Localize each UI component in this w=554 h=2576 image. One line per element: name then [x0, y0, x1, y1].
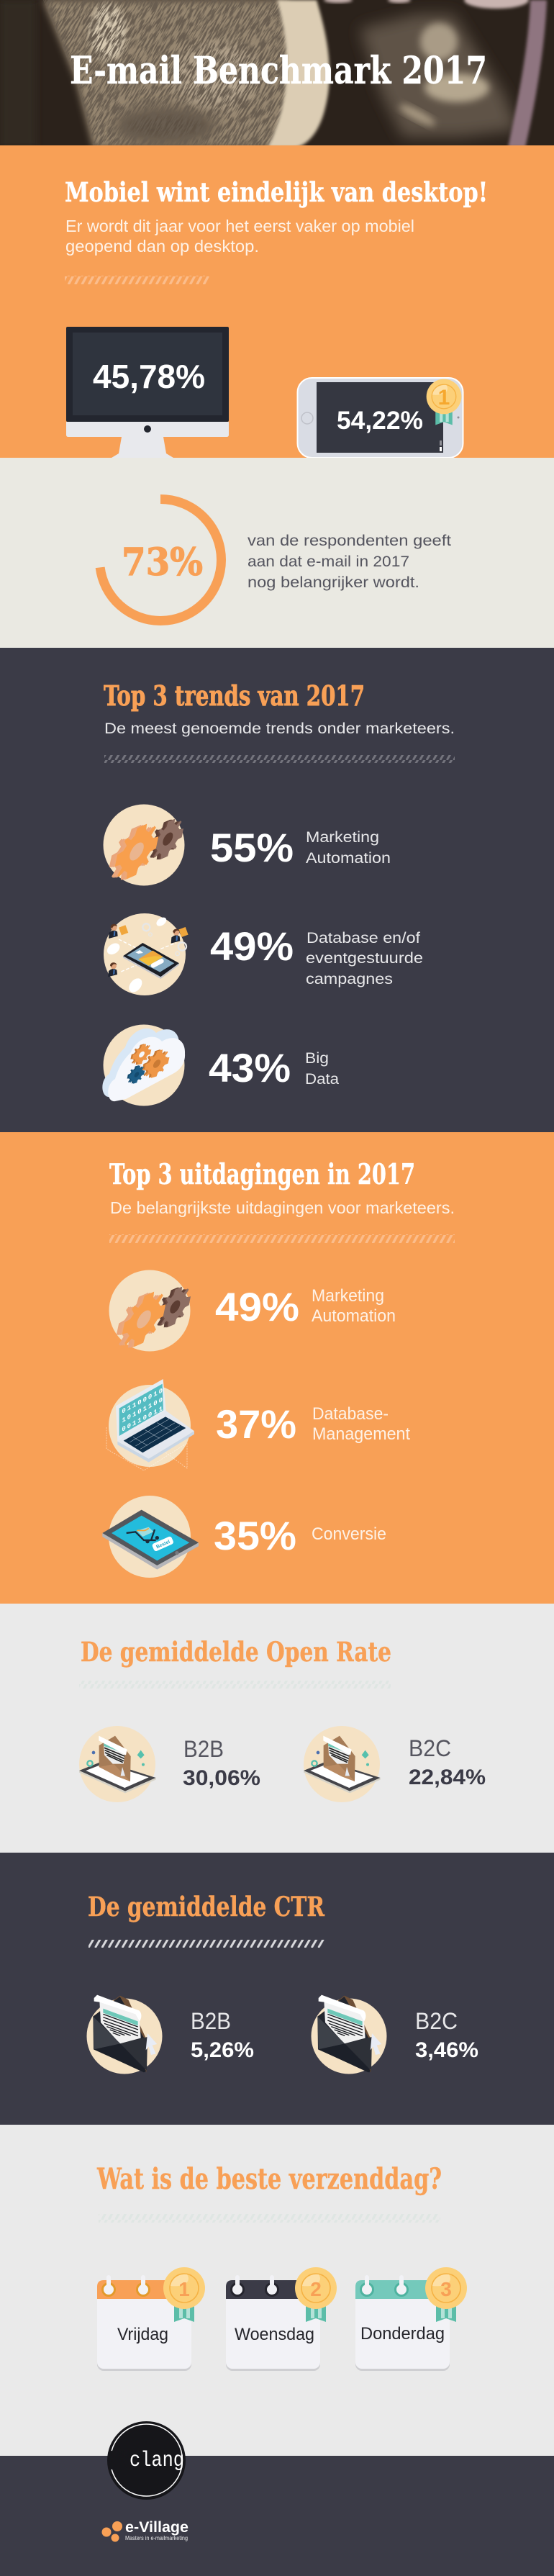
panel: footer	[0, 2421, 554, 2576]
header panel with photo and title	[0, 0, 554, 145]
logo: e-Village: Masters in e-mailmarketing	[125, 2535, 188, 2541]
icon: desktop monitor 45,78%	[66, 327, 229, 458]
panel: average CTR	[0, 1853, 554, 2125]
heading: trends: Top 3 trends van 2017	[104, 679, 365, 712]
challenge 2: database management: 01100010	[122, 1386, 163, 1416]
trend 3: big data: Data	[305, 1071, 339, 1088]
calendar: Donderdag: Donderdag	[360, 2324, 445, 2344]
challenge 3: conversion: Conversie	[312, 1524, 386, 1544]
challenge 3: conversion: Bestel	[155, 1540, 171, 1550]
challenge 3: conversion	[102, 1496, 386, 1578]
icon: desktop monitor 45,78%: 45,78%	[93, 358, 205, 395]
statistic text: nog belangrijker wordt.	[248, 574, 419, 591]
statistic text: van de respondenten geeft	[248, 533, 451, 549]
calendar: Woensdag	[226, 2267, 337, 2371]
icon: smartphone 54,22% with medal	[298, 378, 463, 458]
calendar: Vrijdag: 1	[178, 2278, 190, 2300]
CTR B2C: 3,46%	[415, 2038, 478, 2062]
challenge 2: database management: Database-	[312, 1404, 389, 1424]
heading: challenges: Top 3 uitdagingen in 2017	[109, 1158, 415, 1191]
heading: open rate: De gemiddelde Open Rate	[81, 1636, 391, 1668]
challenge 2: database management: 00110011	[122, 1404, 163, 1434]
logo: e-Village	[102, 2519, 189, 2542]
open rate B2B	[79, 1726, 260, 1802]
challenge 1: marketing automation: Marketing	[312, 1286, 384, 1306]
CTR B2B: B2B	[191, 2008, 231, 2034]
logo: clang: clang	[130, 2449, 184, 2473]
CTR B2B: 5,26%	[191, 2038, 254, 2062]
trend 3: big data: 43%	[209, 1045, 291, 1090]
calendar: Vrijdag: Vrijdag	[117, 2325, 168, 2344]
trend 1: marketing automation: Automation	[306, 850, 391, 867]
logo: e-Village: e-Village	[125, 2519, 189, 2536]
panel: average open rate	[0, 1604, 554, 1853]
calendar: Woensdag: 2	[310, 2278, 322, 2300]
trend 2: database and event campaigns: Database en/of	[306, 930, 420, 946]
heading: CTR: De gemiddelde CTR	[88, 1891, 324, 1922]
subheading: challenges: De belangrijkste uitdagingen voor marketeers.	[110, 1198, 455, 1217]
calendar: Vrijdag	[97, 2267, 205, 2371]
trend 3: big data	[102, 1025, 339, 1106]
open rate B2B: 30,06%	[183, 1766, 260, 1790]
subheading: trends: De meest genoemde trends onder marketeers.	[104, 720, 455, 737]
open rate B2B: B2B	[183, 1736, 224, 1762]
trend 2: database and event campaigns: 49%	[210, 923, 294, 969]
panel: top 3 challenges	[0, 1132, 554, 1604]
challenge 2: database management: 10101100	[122, 1396, 163, 1424]
trend 1: marketing automation: Marketing	[306, 829, 379, 846]
challenge 2: database management: Management	[312, 1424, 410, 1444]
trend 1: marketing automation: 55%	[210, 825, 294, 870]
icon: smartphone 54,22% with medal: 54,22%	[337, 407, 423, 435]
challenge 2: database management: 37%	[216, 1401, 296, 1447]
open rate B2C	[304, 1726, 486, 1802]
logo: clang	[107, 2421, 186, 2500]
open rate B2C: 22,84%	[409, 1766, 486, 1789]
calendar: Donderdag: 3	[440, 2278, 452, 2300]
statistic text: aan dat e-mail in 2017	[248, 553, 409, 570]
challenge 1: marketing automation	[109, 1270, 396, 1357]
trend 2: database and event campaigns	[104, 913, 423, 995]
panel: mobile vs desktop	[0, 145, 554, 458]
challenge 3: conversion: 35%	[214, 1513, 296, 1558]
calendar: Donderdag	[355, 2267, 467, 2371]
intro text: Er wordt dit jaar voor het eerst vaker op mobiel	[65, 217, 414, 235]
ring chart 73%: 73%	[122, 541, 203, 584]
CTR B2B	[86, 1995, 254, 2074]
challenge 1: marketing automation: Automation	[312, 1306, 396, 1326]
ring chart 73%	[99, 500, 222, 620]
icon: smartphone 54,22% with medal: 1	[438, 386, 450, 410]
calendar: Woensdag: Woensdag	[235, 2325, 314, 2344]
panel: top 3 trends	[0, 648, 554, 1133]
challenge 2: database management	[106, 1379, 410, 1470]
challenge 1: marketing automation: 49%	[215, 1284, 299, 1329]
panel: 73 percent statistic	[0, 458, 554, 648]
trend 2: database and event campaigns: eventgestuurde	[306, 950, 423, 967]
open rate B2C: B2C	[409, 1735, 451, 1761]
intro text: geopend dan op desktop.	[65, 237, 259, 256]
trend 2: database and event campaigns: campagnes	[306, 971, 393, 988]
panel: best sending day	[0, 2125, 554, 2456]
CTR B2C: B2C	[415, 2008, 458, 2034]
heading: best day: Wat is de beste verzenddag?	[96, 2162, 442, 2196]
CTR B2C	[311, 1995, 478, 2074]
trend 1: marketing automation	[104, 805, 391, 889]
trend 3: big data: Big	[305, 1050, 329, 1067]
